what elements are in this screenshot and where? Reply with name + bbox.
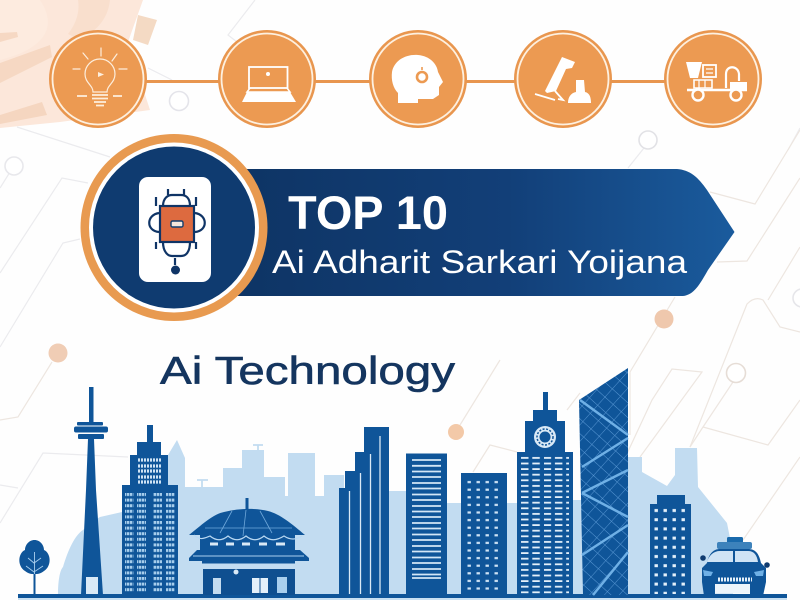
glass diagonal skyscraper <box>579 368 628 595</box>
ground line <box>18 594 787 598</box>
decorative node: hollow top <box>170 92 188 110</box>
banner heading: TOP 10 <box>288 186 448 239</box>
office tower with spire <box>122 425 178 595</box>
decorative node: hollow left <box>5 157 23 175</box>
domed pagoda building <box>189 498 309 595</box>
circle icon: light bulb <box>50 31 146 127</box>
small dotted building <box>650 495 691 595</box>
decorative node: peach left <box>48 344 68 362</box>
CN-style tower <box>74 387 108 595</box>
title banner <box>230 169 734 296</box>
medallion with AI chip icon <box>80 134 268 321</box>
taxi car <box>700 537 770 596</box>
clock tower <box>517 392 573 595</box>
pale background skyline <box>58 440 733 595</box>
circle icon: head <box>370 31 466 127</box>
banner subheading: Ai Adharit Sarkari Yoijana <box>272 244 687 280</box>
decorative node: hollow right <box>726 364 746 382</box>
striped tower <box>406 454 447 595</box>
peach corner decoration <box>0 0 157 128</box>
decorative node: hollow far right <box>793 289 800 307</box>
stepped tower <box>339 427 389 595</box>
decorative node: peach right <box>654 310 674 328</box>
decorative node: peach centre <box>448 424 464 440</box>
circle icon: delivery truck <box>665 31 761 127</box>
circle icon: telescope and person <box>515 31 611 127</box>
decorative node: hollow centre <box>639 131 657 149</box>
chip icon <box>149 189 205 274</box>
section heading: Ai Technology <box>160 350 456 393</box>
dotted tower <box>461 473 507 595</box>
tree <box>19 540 50 596</box>
circle icon: laptop <box>219 31 315 127</box>
connector line between circles <box>140 80 680 83</box>
